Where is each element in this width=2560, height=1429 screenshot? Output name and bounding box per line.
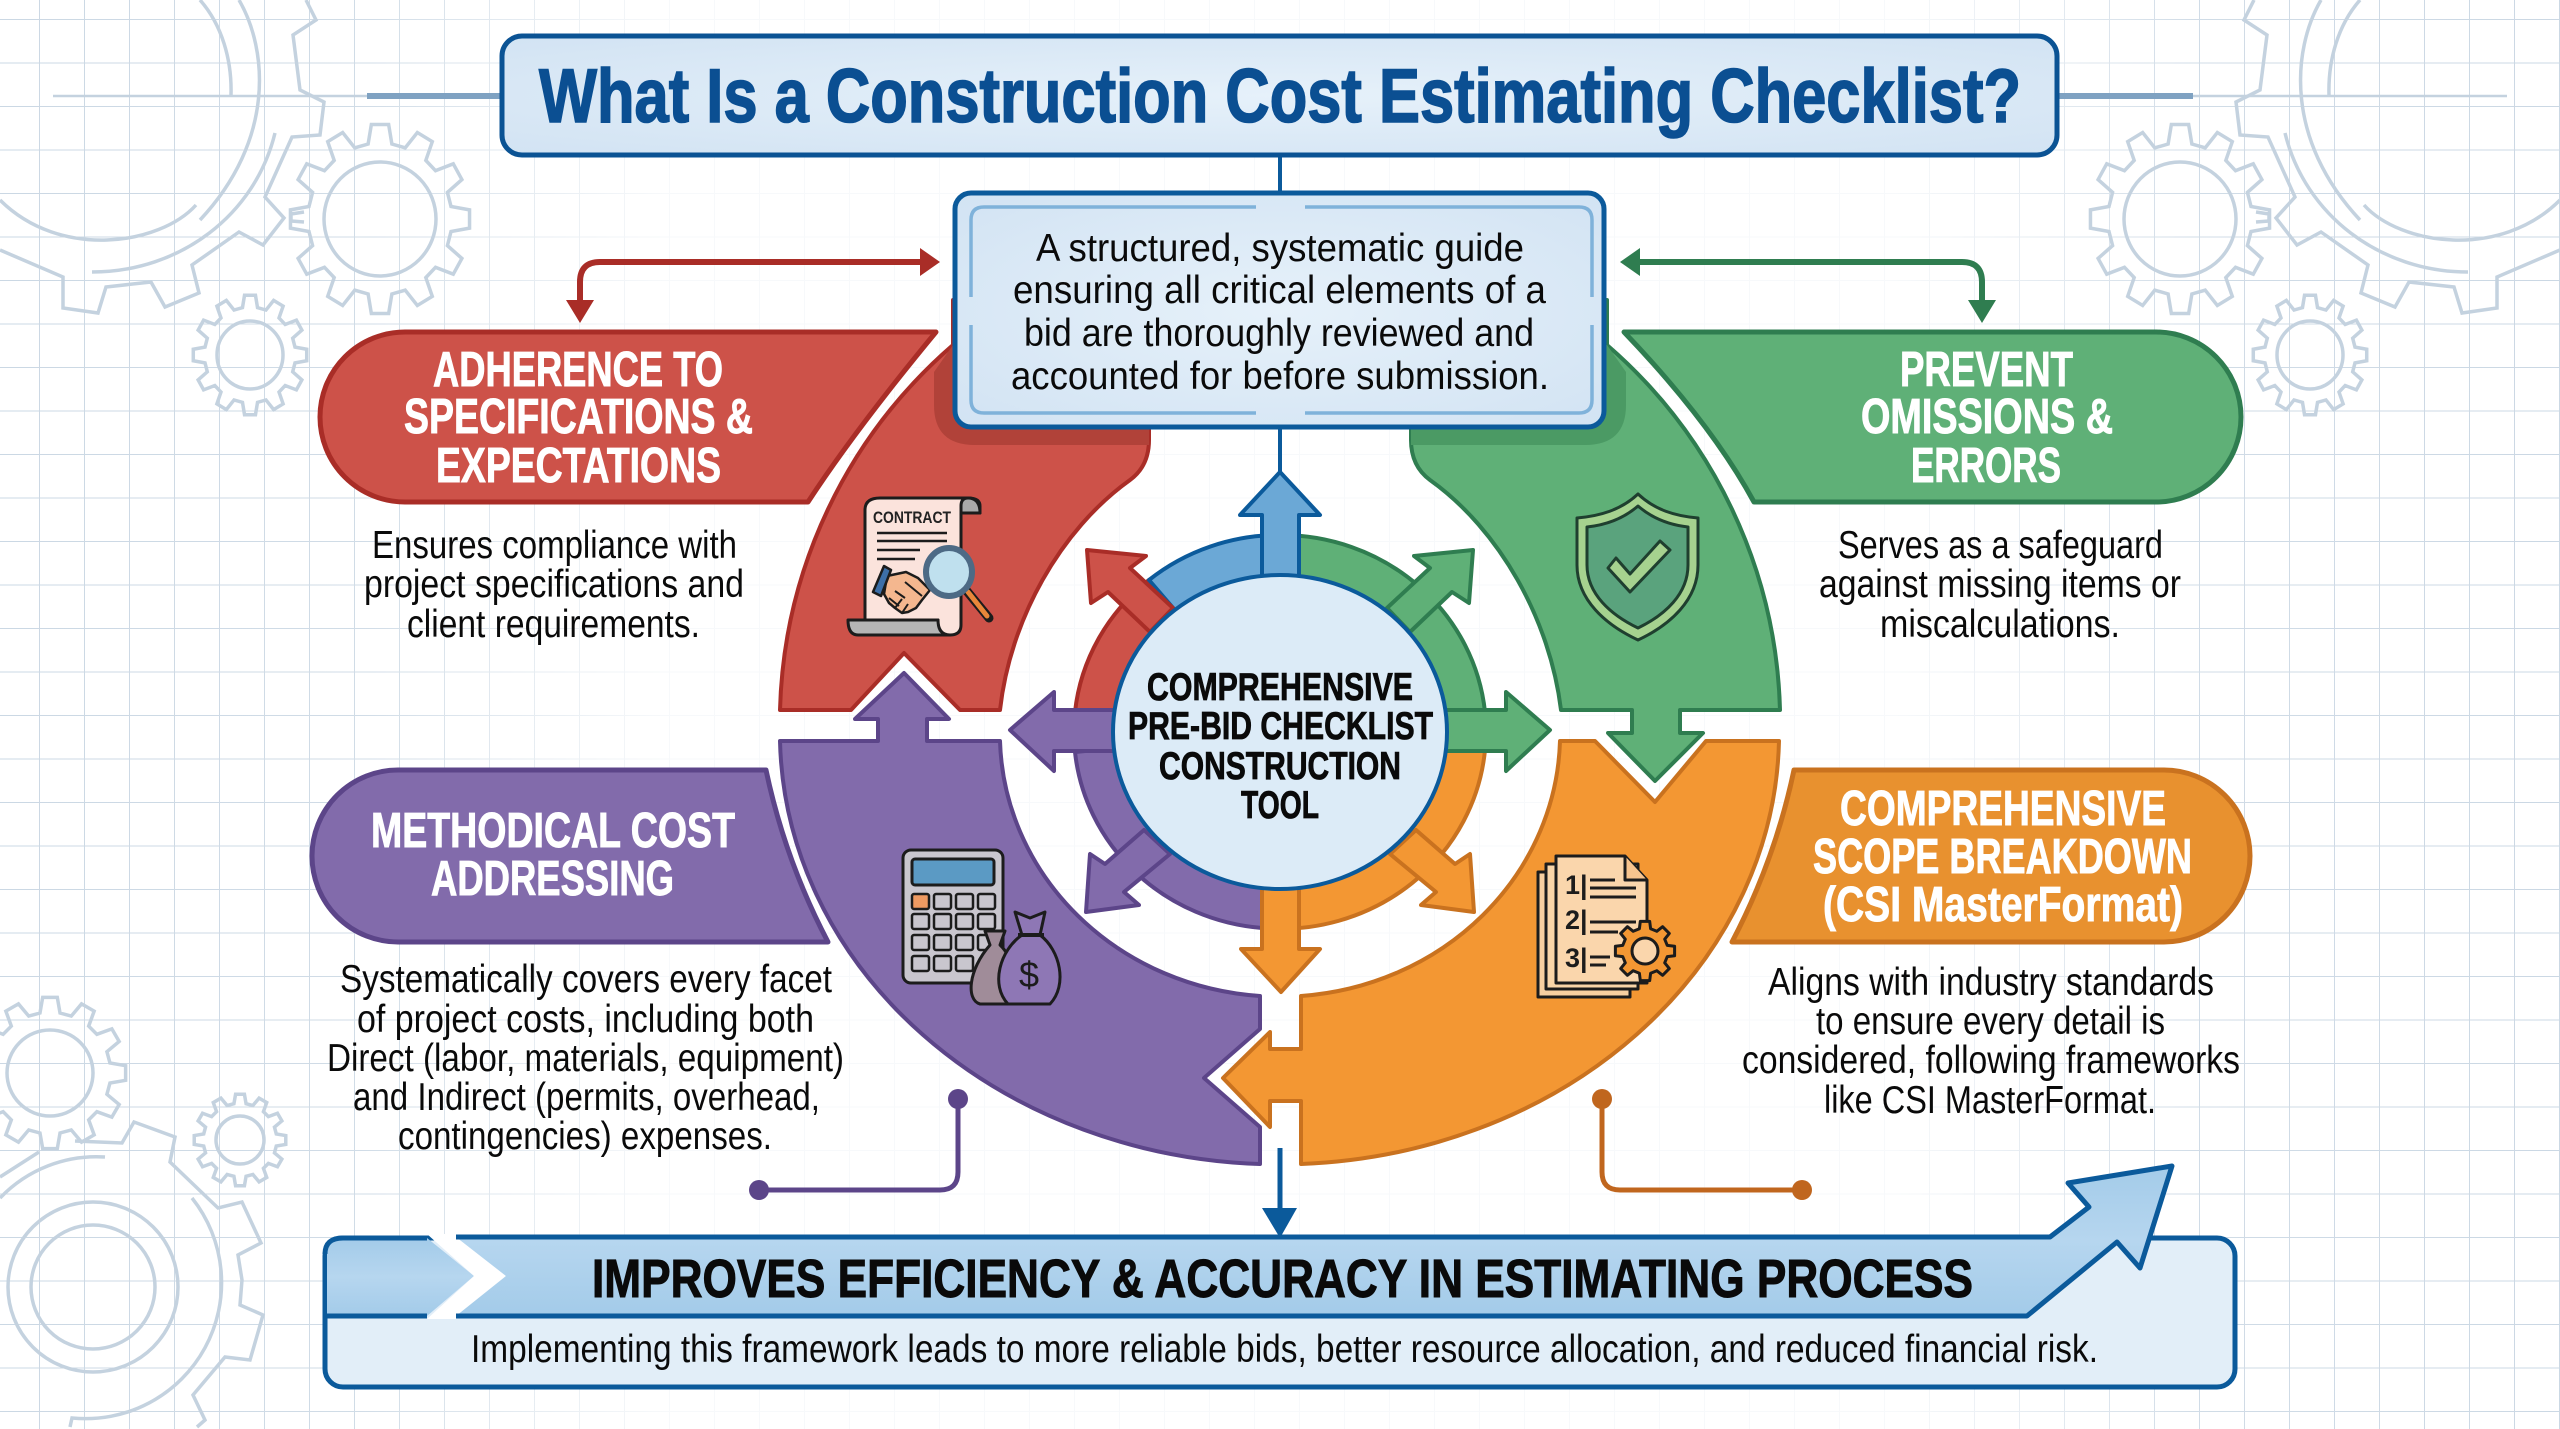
title banner: What Is a Construction Cost Estimating Checklist? (539, 54, 2021, 139)
icon: numbered document and gear: 1| (1565, 870, 1588, 900)
definition box: A structured, systematic guide (1036, 227, 1524, 270)
panel: prevent omissions heading (1624, 332, 2241, 502)
text: adherence description: client requirements. (407, 603, 700, 646)
text: prevent omissions description: against missing items or (1819, 563, 2181, 606)
panel: adherence heading: SPECIFICATIONS & (404, 390, 753, 444)
panel: prevent omissions heading: ERRORS (1911, 439, 2061, 493)
text: prevent omissions description: miscalculations. (1880, 603, 2120, 646)
result heading: IMPROVES EFFICIENCY & ACCURACY IN ESTIMATING PROCESS (592, 1249, 1973, 1309)
icon: shield with check (1577, 494, 1698, 640)
outer quadrant: orange (1223, 741, 1779, 1164)
icon: contract and handshake (848, 498, 989, 635)
red connector arrow (566, 248, 940, 323)
icon: calculator and money bags (903, 850, 1060, 1004)
text: methodical cost description: Direct (labor, materials, equipment) (327, 1037, 844, 1080)
decorative gears: top right (2058, 0, 2560, 415)
text: scope breakdown description: considered, following frameworks (1742, 1039, 2240, 1082)
panel: scope breakdown heading (1732, 770, 2250, 942)
panel: adherence heading: ADHERENCE TO (433, 343, 723, 397)
center hub: TOOL (1241, 784, 1319, 827)
result description: Implementing this framework leads to more reliable bids, better resource allocation, and reduced financial risk. (471, 1328, 2098, 1371)
panel: methodical cost heading (312, 770, 828, 942)
center hub: COMPREHENSIVE (1147, 666, 1413, 709)
left chevron (325, 1238, 474, 1316)
green connector arrow (1620, 248, 1996, 323)
panel: methodical cost heading: METHODICAL COST (371, 804, 735, 858)
text: methodical cost description: Systematically covers every facet (340, 958, 832, 1001)
icon: numbered document and gear (1538, 856, 1675, 997)
panel: adherence heading (320, 332, 936, 502)
icon: numbered document and gear: 2| (1565, 905, 1588, 935)
text: scope breakdown description (1742, 961, 2240, 1122)
title banner (502, 36, 2057, 155)
text: scope breakdown description: to ensure every detail is (1816, 1000, 2165, 1043)
text: adherence description: project specifications and (364, 563, 744, 606)
connector: orange (1592, 1089, 1812, 1200)
icon: numbered document and gear: 3| (1565, 943, 1588, 973)
panel: prevent omissions heading: OMISSIONS & (1861, 390, 2113, 444)
text: methodical cost description: of project costs, including both (357, 998, 814, 1041)
connector to center arrow (1278, 428, 1282, 480)
ribbon arrow (456, 1166, 2172, 1316)
center hub: PRE-BID CHECKLIST (1128, 705, 1433, 748)
decorative gears: bottom left (0, 997, 286, 1427)
text: methodical cost description: contingencies) expenses. (398, 1115, 772, 1158)
outer quadrant: purple (780, 673, 1260, 1164)
definition box: bid are thoroughly reviewed and (1024, 312, 1534, 355)
text: scope breakdown description: Aligns with industry standards (1768, 961, 2214, 1004)
panel: methodical cost heading: ADDRESSING (431, 852, 674, 906)
definition box: accounted for before submission. (1011, 355, 1549, 398)
panel: scope breakdown heading: SCOPE BREAKDOWN (1813, 830, 2192, 884)
panel: prevent omissions heading: PREVENT (1900, 343, 2073, 397)
connector: purple (749, 1089, 968, 1200)
panel: scope breakdown heading: (CSI MasterFormat) (1823, 878, 2183, 932)
decorative gears: top left (0, 0, 502, 415)
inner ring sectors (1075, 535, 1485, 929)
outer quadrant: red (780, 300, 1149, 710)
center hub (1113, 575, 1447, 889)
panel: efficiency and accuracy result (325, 1166, 2235, 1387)
text: adherence description: Ensures compliance with (372, 524, 737, 567)
title connector (1278, 155, 1282, 192)
text: prevent omissions description (1819, 524, 2181, 646)
white gap between chevron and ribbon (427, 1234, 506, 1319)
outer quadrant: green (1411, 300, 1780, 781)
definition box (955, 193, 1604, 427)
center hub: CONSTRUCTION (1159, 745, 1401, 788)
panel: scope breakdown heading: COMPREHENSIVE (1840, 782, 2166, 836)
text: methodical cost description: and Indirect (permits, overhead, (353, 1076, 820, 1119)
icon: calculator and money bags: $ (1019, 954, 1039, 995)
radial arrows (1010, 472, 1550, 992)
text: adherence description (364, 524, 744, 646)
arrow down to result (1262, 1148, 1297, 1238)
text: methodical cost description (327, 958, 844, 1158)
text: scope breakdown description: like CSI MasterFormat. (1824, 1079, 2156, 1122)
text: prevent omissions description: Serves as a safeguard (1838, 524, 2163, 567)
panel: adherence heading: EXPECTATIONS (436, 439, 721, 493)
definition box: ensuring all critical elements of a (1013, 269, 1546, 312)
icon: contract and handshake: CONTRACT (873, 508, 951, 527)
